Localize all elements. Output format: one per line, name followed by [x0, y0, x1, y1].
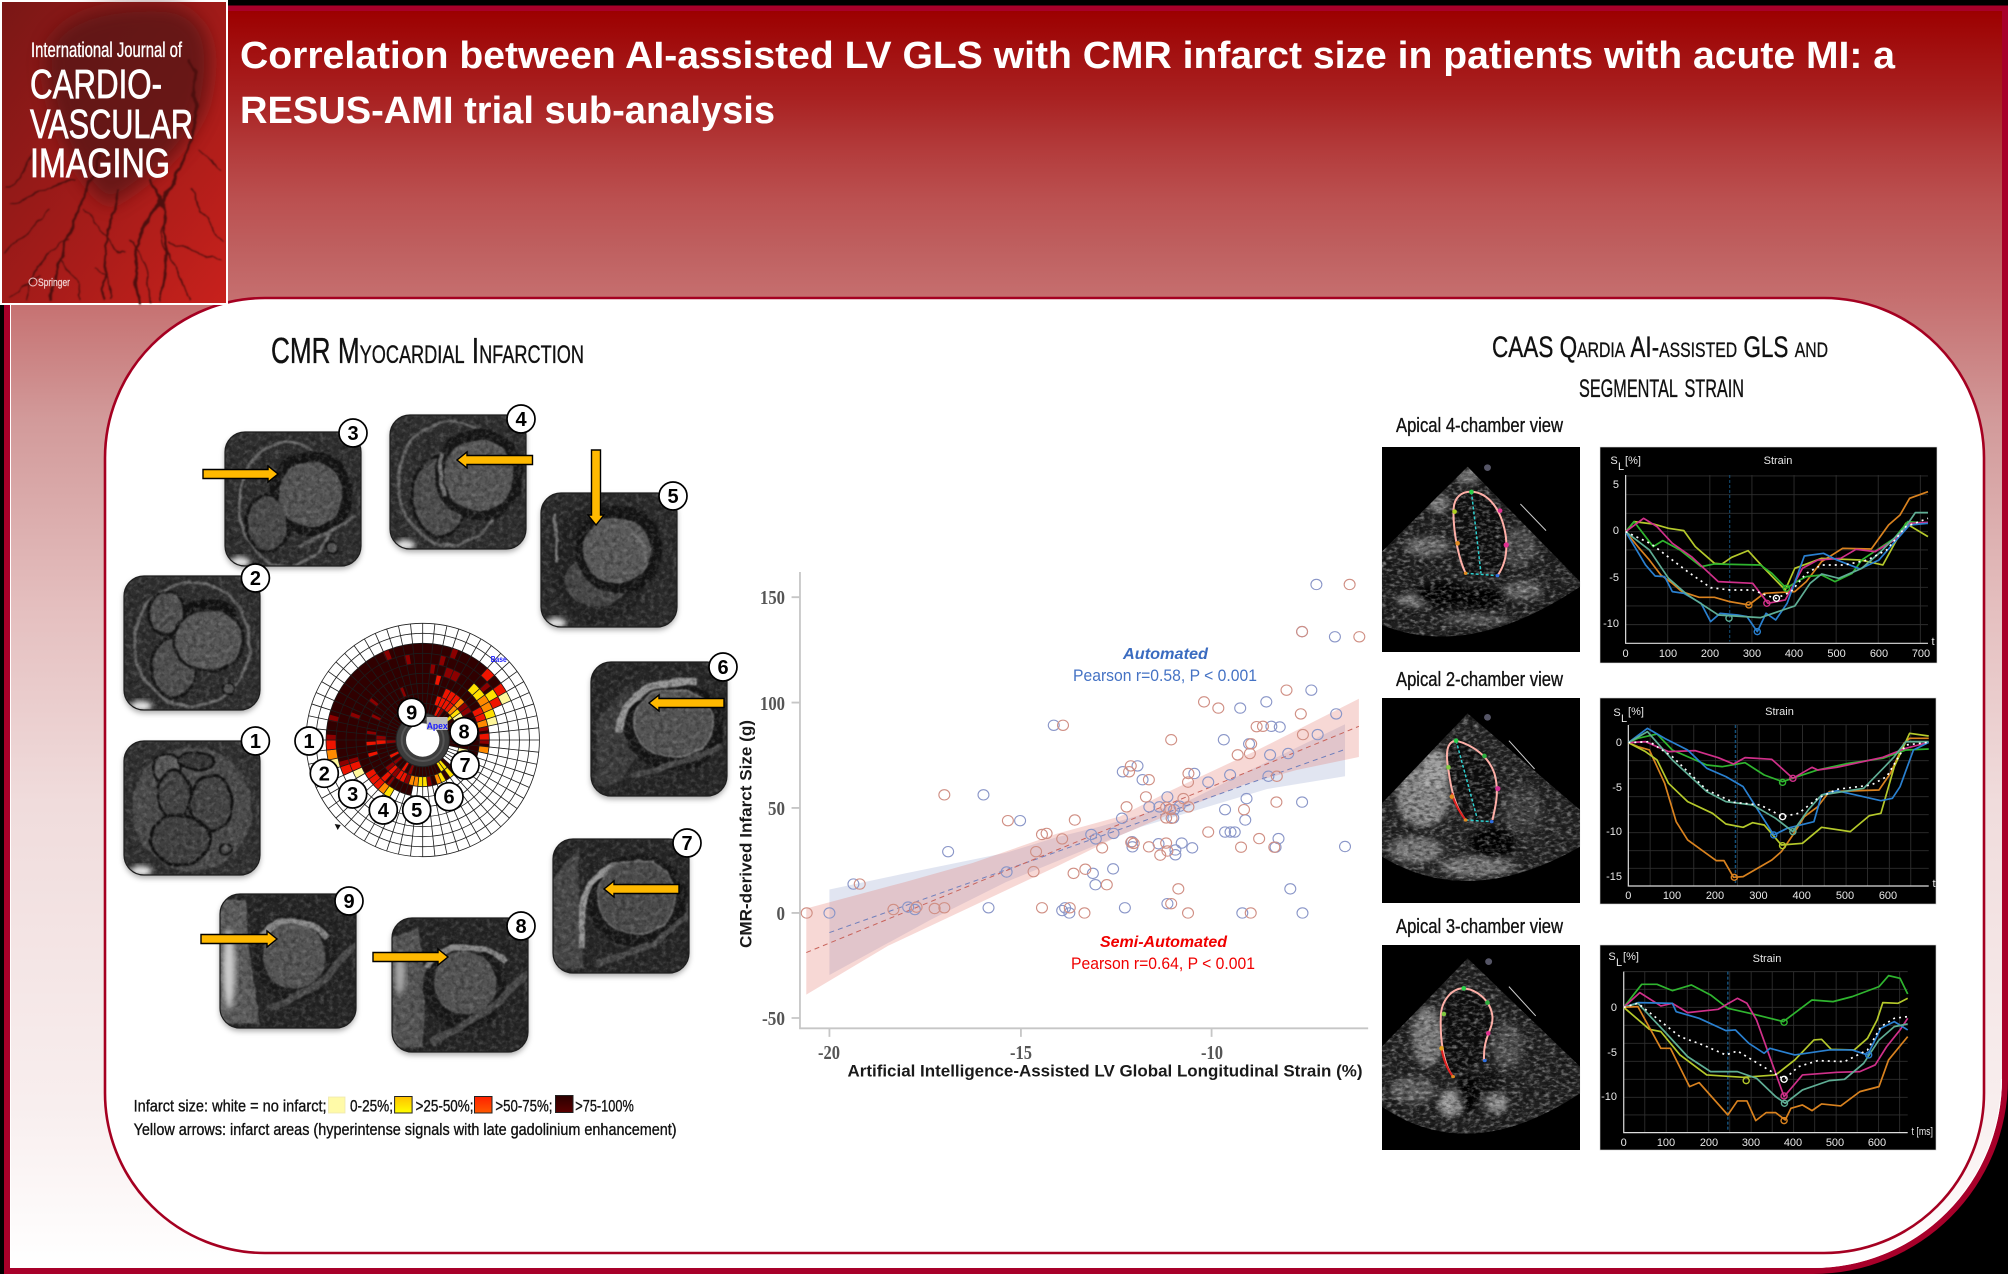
chart text: -15: [1606, 871, 1622, 883]
MRI tile numbers: 7: [681, 833, 693, 855]
title: Correlation between AI-assisted LV GLS with CMR infarct size in patients with acute MI: a: [240, 35, 1896, 77]
chart text: 600: [1868, 1137, 1886, 1149]
polar grid: [306, 623, 539, 857]
chart text: 200: [1700, 1137, 1718, 1149]
chart text: 400: [1784, 1137, 1802, 1149]
MRI tile numbers: 9: [343, 891, 355, 913]
annotation: automated: [1073, 646, 1257, 685]
cover text: International Journal of: [31, 39, 182, 62]
MRI tile numbers: 6: [717, 657, 729, 679]
y axis tick labels: 50: [768, 798, 785, 820]
x axis tick labels: -15: [1010, 1042, 1032, 1064]
chart text: 500: [1826, 1137, 1844, 1149]
chart text: 200: [1701, 648, 1719, 660]
title: RESUS-AMI trial sub-analysis: [240, 90, 775, 132]
chart text: 0: [1616, 737, 1622, 749]
cover text: [29, 39, 193, 289]
chart text: S: [1610, 455, 1618, 467]
journal cover: [0, 0, 228, 305]
chart text: 700: [1912, 648, 1930, 660]
legend swatch: 50-75%: [474, 1096, 492, 1113]
chart text: 300: [1743, 648, 1761, 660]
y axis tick labels: [760, 587, 785, 1030]
chart text: S: [1608, 951, 1616, 963]
bullseye slice numbers: 7: [459, 755, 471, 777]
chart text: [1603, 455, 1935, 660]
yellow infarct arrows: [201, 450, 724, 965]
MRI tile numbers: 2: [250, 568, 261, 590]
chart text: L: [1621, 713, 1627, 725]
chart text: [%]: [1625, 455, 1641, 467]
chart text: 600: [1870, 648, 1888, 660]
cover text: CARDIO-: [30, 61, 162, 107]
legend swatch: 25-50%: [395, 1096, 412, 1113]
chart text: 400: [1793, 890, 1811, 902]
y axis tick labels: 100: [760, 693, 785, 715]
chart text: S: [1613, 707, 1621, 719]
x axis tick labels: -10: [1201, 1042, 1223, 1064]
MRI tile 7: [548, 834, 694, 978]
bullseye slice numbers: 2: [319, 763, 330, 785]
infarct size legend: Infarct size: white = no infarct;: [134, 1096, 327, 1116]
heading: CMR myocardial infarction: CMR Myocardial Infarction: [271, 330, 584, 371]
infarct size legend: >25-50%;: [416, 1096, 474, 1116]
legend swatch: 75-100%: [556, 1096, 573, 1112]
chart text: t: [1932, 878, 1936, 890]
heading: CAAS Qardia: CAAS Qardia AI-assisted GLS and: [1492, 331, 1828, 364]
chart text: 100: [1657, 1137, 1675, 1149]
chart text: 500: [1827, 648, 1846, 660]
coloured infarct cells: [331, 648, 514, 832]
chart text: Strain: [1765, 706, 1794, 718]
chart text: t [ms]: [1912, 1126, 1933, 1138]
bullseye slice numbers: 5: [411, 800, 422, 822]
chart text: 600: [1879, 890, 1897, 902]
base label: Base: [491, 655, 507, 664]
infarct size legend: [134, 1096, 677, 1139]
strain chart: 4-chamber: [1600, 447, 1937, 663]
dark infarct sectors: [331, 648, 514, 832]
x axis title: Artificial Intelligence-Assisted LV Global Longitudinal Strain (%): [848, 1062, 1362, 1080]
main white panel: [105, 298, 1984, 1253]
MRI tile 1: [119, 736, 265, 880]
y axis tick labels: -50: [762, 1008, 785, 1030]
annotation: semi-automated: Semi-Automated: [1100, 934, 1228, 951]
strain chart: 2-chamber: [1600, 698, 1936, 904]
chart text: t: [1931, 636, 1935, 648]
MRI tile numbers: 8: [515, 916, 527, 938]
cover text: IMAGING: [30, 140, 170, 186]
view label: apical 2-chamber: Apical 2-chamber view: [1396, 669, 1563, 691]
bullseye slice numbers: 8: [458, 722, 470, 744]
centre hub: [396, 713, 449, 767]
chart text: 0: [1611, 1002, 1617, 1014]
annotation: semi-automated: Pearson r=0.64, P < 0.001: [1071, 954, 1255, 973]
chart grid: [1624, 972, 1908, 1133]
chart text: -10: [1606, 826, 1622, 838]
chart text: -5: [1609, 572, 1619, 584]
chart text: 300: [1749, 890, 1768, 902]
infarct size legend: >50-75%;: [495, 1096, 552, 1116]
heart vessels artwork: [5, 5, 222, 302]
MRI tile numbers: 1: [250, 731, 261, 753]
chart text: 0: [1621, 1137, 1627, 1149]
chart text: 0: [1625, 890, 1631, 902]
chart text: 0: [1613, 525, 1619, 537]
MRI tile numbers: 3: [347, 423, 359, 445]
legend swatch: 0-25%: [328, 1097, 345, 1113]
chart text: 500: [1836, 890, 1854, 902]
bullseye slice numbers: 6: [443, 787, 455, 809]
chart text: -10: [1603, 618, 1619, 630]
bullseye polar map: [306, 623, 539, 857]
bullseye slice numbers: 3: [347, 784, 358, 806]
chart text: 300: [1742, 1137, 1760, 1149]
scatter plot: [736, 572, 1368, 1080]
apex label: Apex: [427, 721, 448, 731]
chart text: L: [1618, 461, 1624, 473]
MRI tile 3: [220, 427, 366, 571]
annotation: automated: Pearson r=0.58, P < 0.001: [1073, 666, 1257, 685]
chart text: Strain: [1764, 455, 1792, 467]
chart text: [1601, 951, 1933, 1149]
orientation marker: [335, 824, 341, 830]
chart grid: [1628, 725, 1929, 886]
infarct size legend: >75-100%: [575, 1096, 634, 1116]
MRI tile 9: [215, 889, 361, 1033]
chart text: -10: [1601, 1091, 1617, 1103]
chart text: -5: [1607, 1047, 1617, 1059]
bullseye slice numbers: 4: [378, 800, 390, 822]
annotation: automated: Automated: [1122, 646, 1209, 663]
title: [240, 35, 1896, 132]
chart text: 200: [1706, 890, 1724, 902]
chart text: -5: [1612, 782, 1622, 794]
cover text: Springer: [38, 277, 70, 289]
bullseye slice numbers: [295, 698, 479, 824]
MRI tile 6: [586, 657, 732, 801]
infarct size legend: Yellow arrows: infarct areas (hyperintense signals with late gadolinium enhancement): [134, 1120, 677, 1139]
apex label: [427, 717, 448, 731]
heading: CAAS Qardia: segmental strain: [1579, 364, 1744, 405]
chart grid: [1626, 475, 1928, 643]
MRI tile 8: [387, 913, 533, 1057]
infarct size legend: 0-25%;: [350, 1096, 393, 1116]
strain curves: [1624, 976, 1908, 1121]
strain chart: 3-chamber: [1600, 945, 1936, 1150]
chart text: Strain: [1753, 953, 1781, 965]
chart text: 100: [1663, 890, 1681, 902]
chart text: 0: [1623, 648, 1629, 660]
chart text: 5: [1613, 479, 1619, 491]
cover text: VASCULAR: [30, 101, 193, 147]
MRI tile 4: [385, 410, 531, 554]
echo image: 3-chamber: [1378, 945, 1584, 1152]
confidence bands, regression lines, axes and points: [792, 572, 1368, 1037]
panel: cardiac MR tiles: [119, 410, 732, 1057]
view label: apical 4-chamber: Apical 4-chamber view: [1396, 415, 1563, 437]
chart text: L: [1616, 957, 1622, 969]
chart text: [1606, 706, 1936, 902]
bullseye slice numbers: 1: [303, 731, 315, 753]
MRI tile 2: [119, 571, 265, 715]
x axis tick labels: [818, 1042, 1223, 1064]
chart text: [%]: [1623, 951, 1639, 963]
chart text: [%]: [1628, 706, 1644, 718]
heading: CAAS Qardia: [1492, 331, 1828, 405]
strain curves: [1628, 728, 1929, 877]
bullseye slice numbers: 9: [406, 702, 417, 724]
MRI tile numbers: 4: [515, 409, 527, 431]
y axis tick labels: 0: [776, 903, 785, 925]
MRI tile 5: [536, 488, 682, 632]
y axis title: CMR-derived Infarct Size (g): [736, 720, 756, 948]
x axis tick labels: -20: [818, 1042, 840, 1064]
chart text: 400: [1785, 648, 1803, 660]
echo image: 4-chamber: [1378, 447, 1584, 652]
y axis tick labels: 150: [760, 587, 785, 609]
annotation: semi-automated: [1071, 934, 1255, 973]
MRI tile numbers: 5: [667, 486, 679, 508]
echo image: 2-chamber: [1378, 698, 1584, 903]
view label: apical 3-chamber: Apical 3-chamber view: [1396, 916, 1563, 938]
MRI tile numbers: [241, 405, 737, 940]
strain curves: [1626, 492, 1928, 632]
chart text: 100: [1659, 648, 1677, 660]
